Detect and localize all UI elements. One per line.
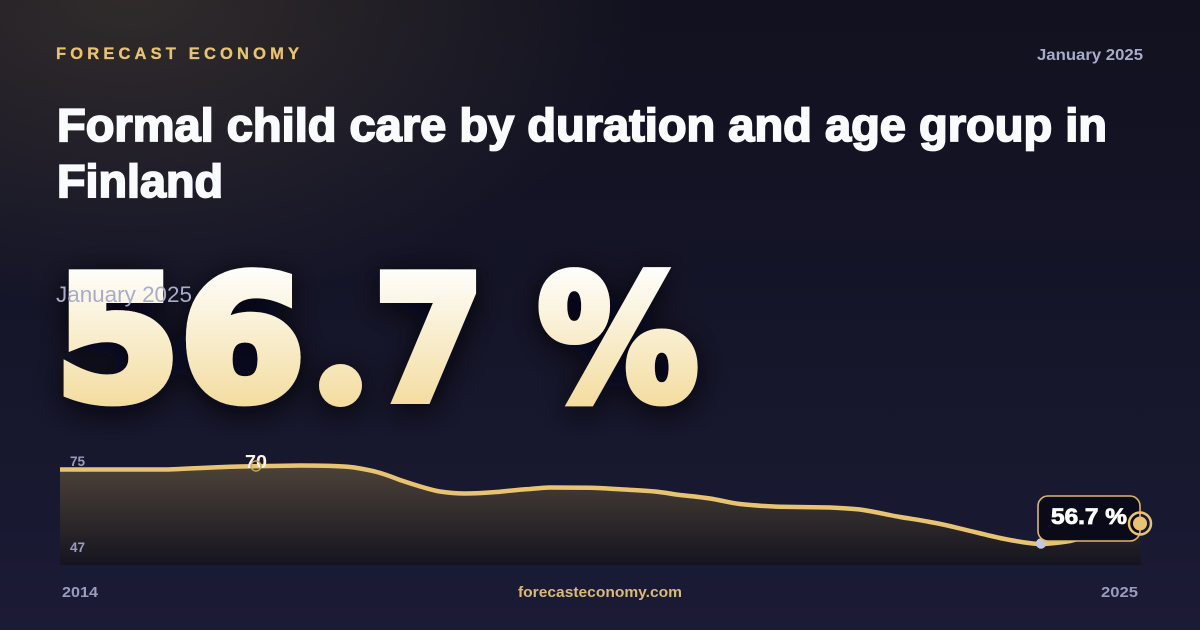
area chart <box>60 452 1151 565</box>
big number value: 56 <box>55 241 305 440</box>
brand label: FORECAST ECONOMY <box>56 45 299 63</box>
big number value: . <box>312 262 369 436</box>
title <box>57 99 1107 207</box>
area fill <box>60 466 1141 565</box>
latest point marker <box>1129 512 1151 534</box>
end year: 2025 <box>1101 584 1138 601</box>
big number value: 7 <box>374 241 484 440</box>
start year: 2014 <box>62 584 99 601</box>
peak label: 70 <box>245 452 267 472</box>
trend line <box>60 466 1140 544</box>
peak marker <box>251 461 261 471</box>
axis max label: 75 <box>70 454 86 469</box>
title: Formal child care by duration and age group in <box>57 99 1107 151</box>
axis min label: 47 <box>70 540 85 555</box>
date top right: January 2025 <box>1037 47 1143 64</box>
latest value callout <box>1038 496 1140 541</box>
title: Finland <box>57 155 223 207</box>
overlapping date label: January 2025 <box>56 282 192 307</box>
latest value callout: 56.7 % <box>1051 504 1127 529</box>
source site: forecasteconomy.com <box>518 585 682 601</box>
big number value <box>55 241 698 440</box>
low point marker <box>1036 538 1046 549</box>
big number value: % <box>538 241 698 440</box>
